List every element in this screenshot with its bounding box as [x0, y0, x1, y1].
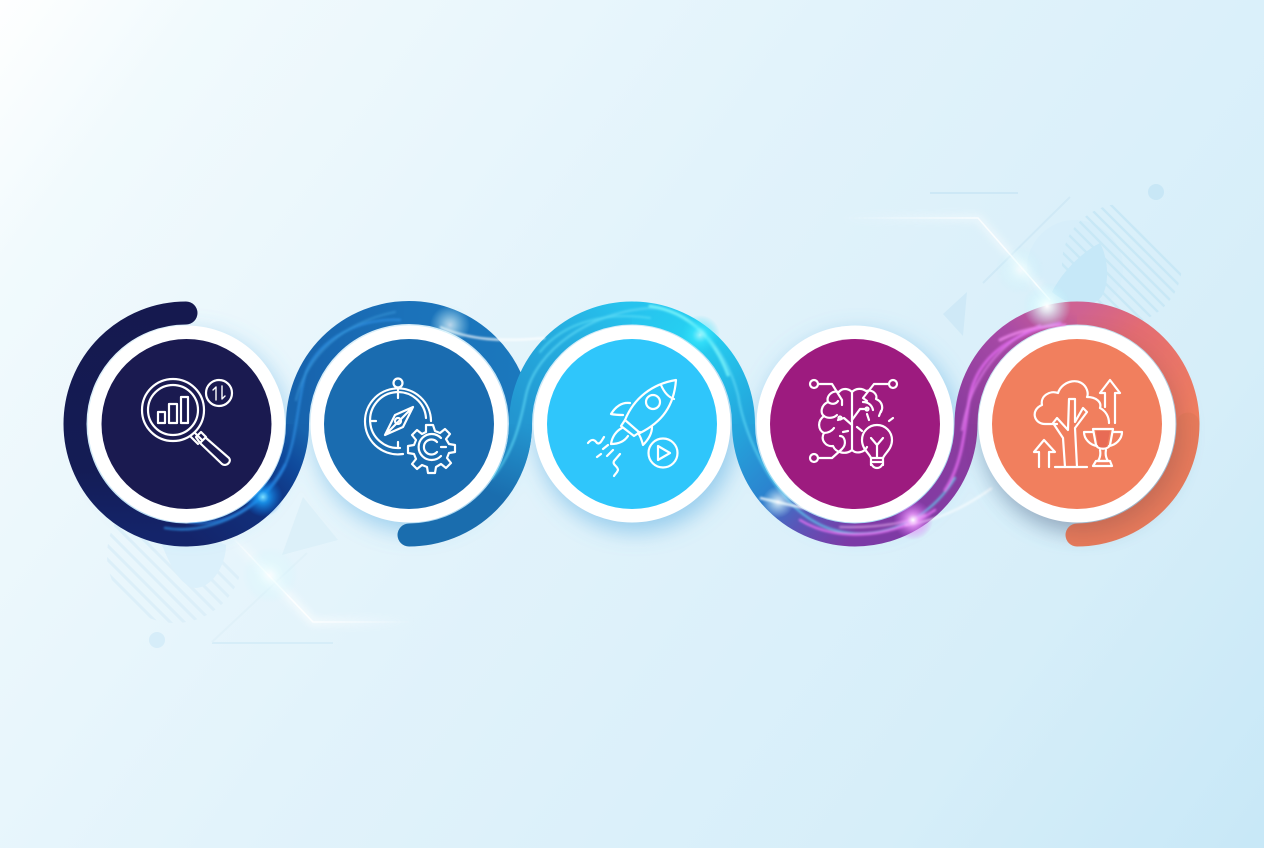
step 1 circle: research [88, 326, 285, 522]
icon: tree, trophy and growth arrows [1034, 380, 1122, 467]
step 3 circle: launch [534, 326, 730, 522]
step 4 circle: insight [756, 326, 954, 522]
soft shadows below the step circles [90, 332, 1181, 532]
decoration: bottom left geometric shapes [107, 498, 338, 648]
decoration: soft arc under step 4 [440, 327, 992, 525]
step 5 circle: growth [978, 326, 1181, 532]
icon: magnifier with bar chart [142, 379, 232, 465]
decoration: top right geometric shapes [930, 184, 1181, 336]
ribbon: navy and blue, steps 1 to 2 [75, 313, 520, 535]
icon: rocket with play button [588, 380, 678, 476]
icon: compass with gear [365, 378, 455, 473]
icon: brain with circuit and light bulb [810, 380, 897, 468]
step 2 circle: strategy [310, 326, 508, 522]
ribbon: cyan through purple to orange, steps 3 to 5 [494, 313, 1188, 535]
glow points on the ribbon [242, 246, 1071, 603]
ribbon highlights: flowing light strands [165, 306, 1065, 534]
decoration: light streak top right [840, 218, 1050, 300]
decoration: light streak bottom left [235, 540, 413, 622]
